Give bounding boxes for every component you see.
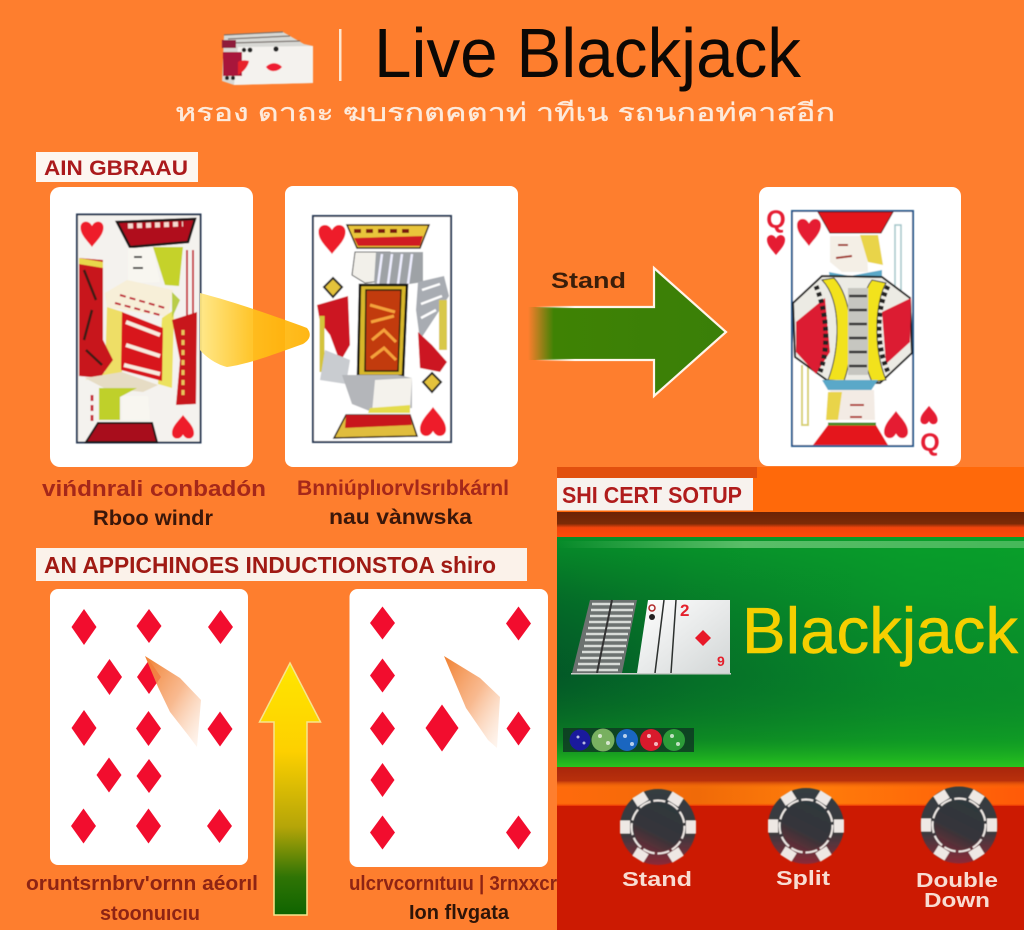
icon: card shoe and hand bbox=[571, 600, 731, 674]
scarf bbox=[829, 270, 882, 284]
label: stand: Stand bbox=[551, 268, 626, 293]
captions: first card: Rboo windr bbox=[93, 507, 213, 530]
body bbox=[85, 307, 123, 380]
lower scarf and face bbox=[822, 380, 878, 392]
heading: section two: AN APPICHINOES INDUCTIONSTOA shiro bbox=[44, 552, 496, 578]
label: double down: Double bbox=[916, 870, 998, 892]
captions: second card: nau vànwska bbox=[329, 506, 472, 529]
fold shadow bbox=[444, 656, 500, 748]
heading: section one bbox=[36, 152, 198, 182]
card: king three bbox=[759, 187, 961, 466]
lower figure bbox=[85, 372, 158, 392]
header bbox=[175, 14, 835, 127]
hearts bbox=[318, 225, 346, 254]
captions: first card: vińdnrali conbadón bbox=[42, 476, 266, 501]
title: Live Blackjack bbox=[374, 14, 802, 92]
heading: chart setup: SHI CERT SOTUP bbox=[562, 482, 742, 508]
top strip bbox=[557, 467, 1024, 512]
right red column bbox=[172, 312, 197, 405]
button: double down: Down bbox=[924, 890, 990, 912]
sword bbox=[895, 225, 901, 290]
lower figure bbox=[342, 375, 412, 412]
button: stand bbox=[620, 789, 696, 891]
lower crown bbox=[86, 423, 157, 442]
captions: left diamond card: stoonuıcıu bbox=[100, 903, 200, 925]
table rail bbox=[557, 767, 1024, 930]
table felt bbox=[557, 537, 1024, 767]
inner hearts bbox=[797, 219, 821, 246]
label: split: Split bbox=[776, 867, 830, 890]
icon: deck of cards bbox=[222, 32, 313, 85]
panel: first hand section bbox=[36, 152, 961, 530]
arrow: yellow swoosh bbox=[200, 293, 310, 367]
diamond pips bbox=[370, 606, 531, 850]
icon: card shoe and hand: 9 bbox=[717, 653, 725, 669]
corner marks: Q bbox=[766, 206, 786, 234]
card: diamonds left bbox=[50, 589, 248, 865]
captions: left diamond card bbox=[26, 873, 258, 925]
captions: left diamond card: oruntsrnbrv'ornn aéorıl bbox=[26, 873, 258, 895]
small diamonds bbox=[324, 278, 342, 297]
card: king three: Q bbox=[920, 429, 940, 457]
captions: second card bbox=[297, 477, 509, 529]
crown bbox=[117, 219, 195, 247]
button: double down bbox=[916, 786, 998, 912]
hearts bbox=[80, 222, 104, 247]
heading: section one: AIN GBRAAU bbox=[44, 157, 188, 180]
icon: chip tray bbox=[563, 728, 694, 752]
centre panel bbox=[358, 285, 407, 376]
card: diamonds right bbox=[350, 589, 548, 867]
captions: right diamond card: ulcrvcornıtuıu | 3rnxxcr bbox=[349, 873, 557, 895]
arrow: stand bbox=[528, 268, 726, 396]
right arm bbox=[416, 276, 449, 340]
left arm bbox=[317, 296, 350, 362]
divider bbox=[339, 29, 342, 81]
left red column bbox=[79, 258, 113, 378]
captions: right diamond card bbox=[349, 873, 557, 924]
card: king one bbox=[50, 187, 253, 467]
panel: chart setup bbox=[557, 467, 1024, 930]
captions: first card bbox=[42, 476, 266, 530]
crown bbox=[347, 225, 429, 248]
label: stand: Stand bbox=[622, 868, 692, 891]
subtitle: หรอง ดาถะ ฆบรกตคตาท่ าทีเน รถนกอท่คาสอีก bbox=[175, 99, 835, 127]
label: blackjack: Blackjack bbox=[742, 594, 1018, 667]
collar bbox=[105, 280, 173, 317]
face and hair bbox=[352, 252, 390, 283]
card: king two bbox=[285, 186, 518, 467]
scepter bbox=[187, 250, 193, 320]
body bbox=[793, 276, 912, 383]
lower crown bbox=[813, 425, 888, 445]
button: split bbox=[768, 788, 844, 890]
icon: card shoe and hand: 2 bbox=[680, 601, 689, 620]
diamond pips bbox=[71, 609, 233, 844]
lower crown bbox=[334, 415, 417, 438]
captions: second card: Bnniúplıorvlsrıbkárnl bbox=[297, 477, 509, 500]
face and hair bbox=[128, 248, 160, 283]
arrow: yellow to green up bbox=[260, 663, 320, 915]
fold shadow bbox=[145, 656, 201, 747]
crown bbox=[818, 212, 893, 233]
panel: second hand section bbox=[26, 548, 557, 925]
captions: right diamond card: Ion flvgata bbox=[409, 902, 510, 924]
face and hair bbox=[830, 236, 868, 272]
